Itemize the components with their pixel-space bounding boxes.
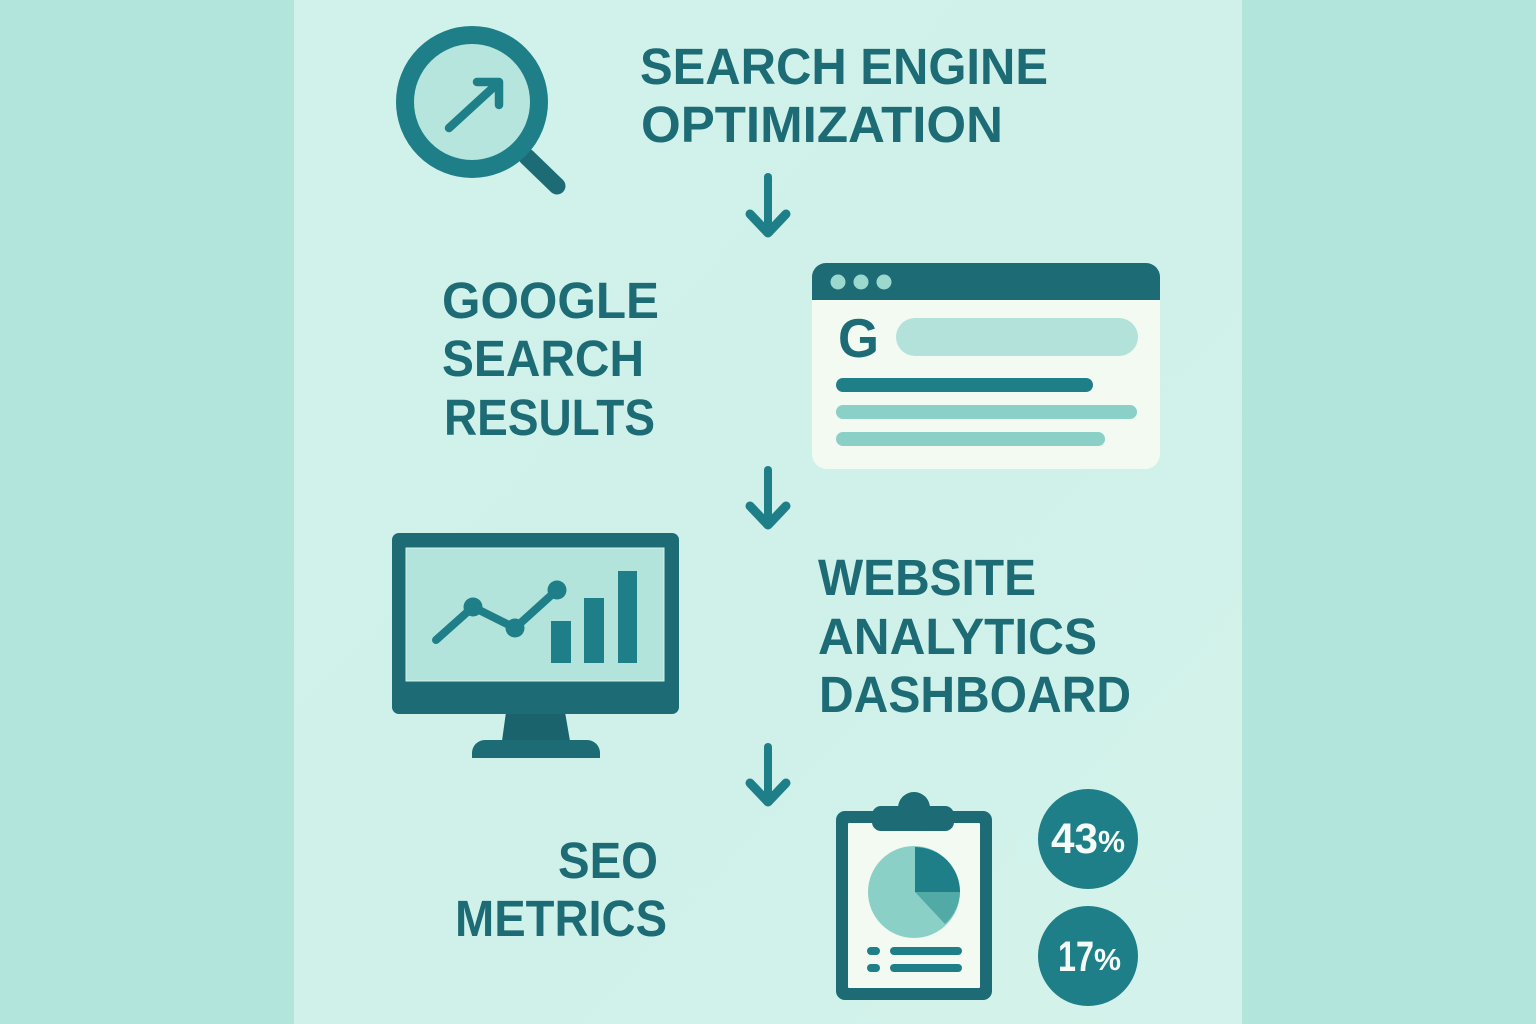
badge: 17%: 17 (1058, 933, 1094, 981)
heading: seo metrics: SEO (558, 832, 658, 889)
heading: seo metrics (455, 832, 667, 947)
heading: search engine optimization: SEARCH ENGINE (640, 38, 1048, 95)
arrow: step 3 to 4 (750, 747, 786, 802)
badge: 43% (1038, 789, 1138, 889)
heading: website analytics dashboard (818, 549, 1131, 723)
heading: google search results: SEARCH (442, 330, 644, 387)
heading: google search results (442, 272, 659, 446)
icon: browser window with search results: G (838, 307, 879, 369)
arrow: step 1 to 2 (750, 177, 786, 233)
heading: website analytics dashboard: DASHBOARD (819, 666, 1131, 723)
heading: google search results: GOOGLE (442, 272, 659, 329)
badge: 43%: 43 (1051, 815, 1098, 863)
icon: clipboard with pie chart (836, 792, 992, 1000)
icon: monitor with analytics charts (392, 533, 679, 758)
badge: 17% (1038, 906, 1138, 1006)
panel: central column (294, 0, 1242, 1024)
badge: 43%: % (1098, 824, 1125, 859)
icon: magnifying glass with rising arrow (405, 35, 557, 186)
heading: seo metrics: METRICS (455, 890, 667, 947)
heading: search engine optimization: OPTIMIZATION (641, 96, 1003, 153)
badge: 17%: % (1094, 942, 1121, 977)
icon: browser window with search results (812, 263, 1160, 469)
heading: google search results: RESULTS (444, 389, 655, 446)
heading: website analytics dashboard: WEBSITE (818, 549, 1036, 606)
heading: website analytics dashboard: ANALYTICS (818, 608, 1097, 665)
arrow: step 2 to 3 (750, 470, 786, 525)
heading: search engine optimization (640, 38, 1048, 153)
